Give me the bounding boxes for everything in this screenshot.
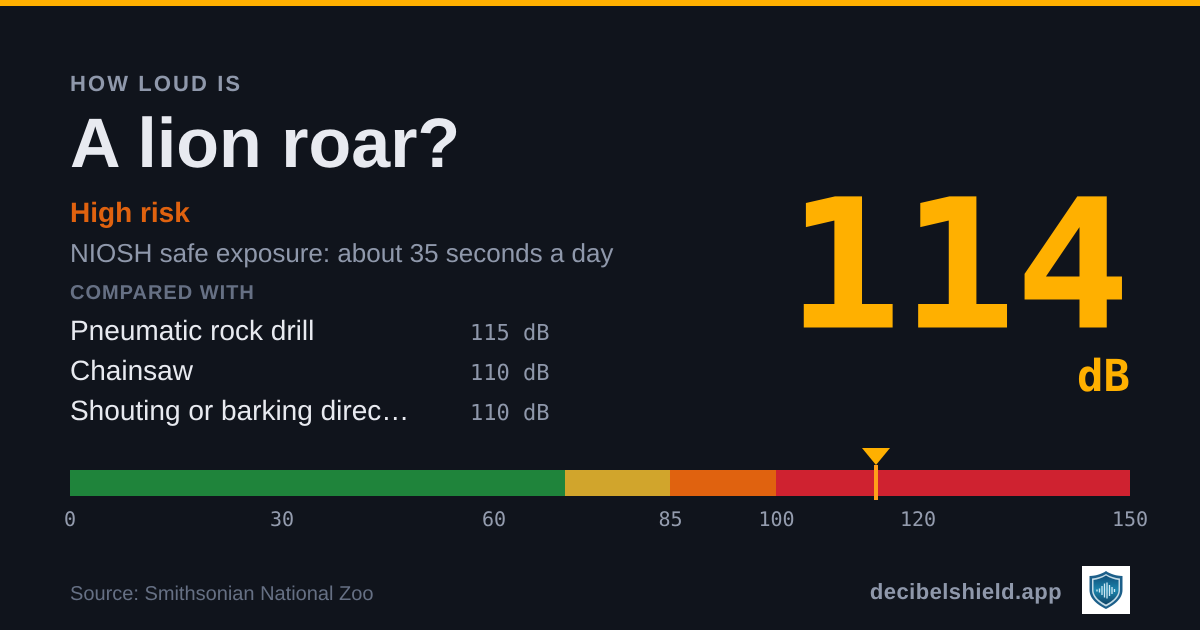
decibel scale bar (70, 470, 1130, 496)
decibel unit: dB (1077, 351, 1130, 402)
scale ticks: 120 (900, 507, 936, 531)
title: A lion roar? (70, 104, 460, 182)
scale ticks: 60 (482, 507, 506, 531)
compared with heading: COMPARED WITH (70, 282, 255, 304)
top accent bar (0, 0, 1200, 6)
scale ticks: 0 (64, 507, 76, 531)
value: 110 dB: 110 dB (470, 361, 549, 386)
comparison: pneumatic rock drill: Pneumatic rock drill (70, 315, 314, 346)
risk level: High risk (70, 197, 190, 228)
scale ticks: 30 (270, 507, 294, 531)
green segment (70, 470, 564, 496)
comparison: chainsaw: Chainsaw (70, 355, 193, 386)
scale ticks: 85 (658, 507, 683, 531)
site url: decibelshield.app (870, 579, 1062, 604)
marker triangle (862, 448, 890, 465)
eyebrow heading: HOW LOUD IS (70, 71, 242, 96)
comparison list (70, 315, 549, 426)
icon: shield logo (1082, 566, 1130, 614)
big decibel number: 114 (787, 162, 1130, 369)
yellow segment (564, 470, 670, 496)
value: 110 dB: 110 dB (470, 401, 549, 426)
marker line (874, 465, 878, 500)
scale ticks: 150 (1112, 507, 1148, 531)
source: Source: Smithsonian National Zoo (70, 583, 374, 605)
scale ticks: 100 (758, 507, 795, 531)
safe exposure text: NIOSH safe exposure: about 35 seconds a day (70, 238, 613, 268)
red segment (776, 470, 1130, 496)
comparison: shouting or barking: Shouting or barking direc… (70, 395, 409, 426)
orange segment (670, 470, 776, 496)
value: 115 dB: 115 dB (470, 321, 549, 346)
